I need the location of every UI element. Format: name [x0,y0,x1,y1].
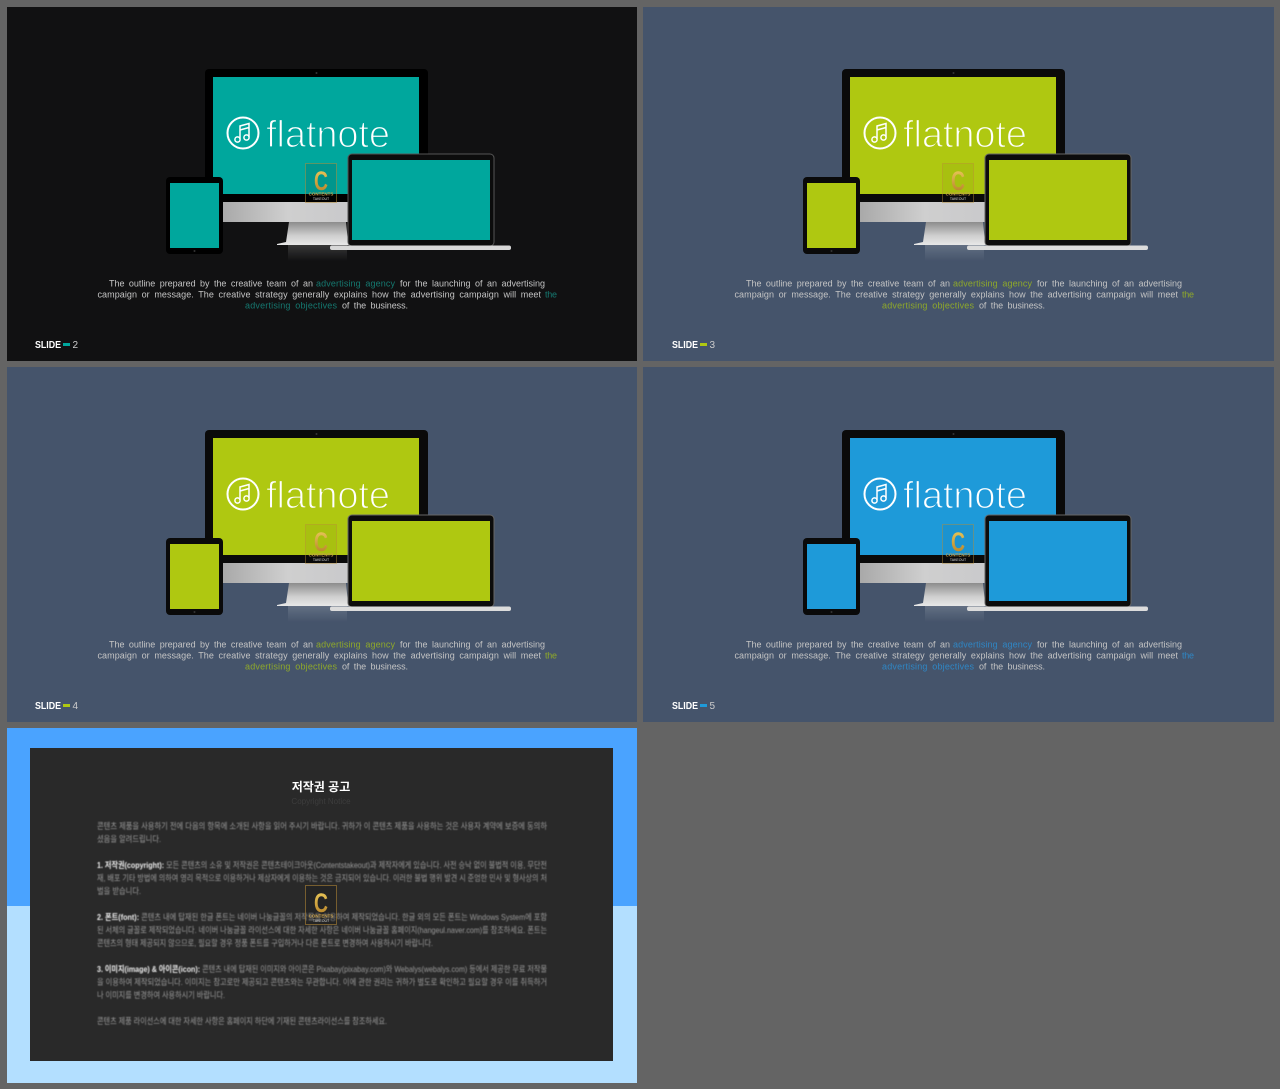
description text: advertising objectives [245,662,338,672]
notice body text: 나 이미지를 변경하여 사용하시기 바랍니다. [97,990,225,1000]
description text: The outline prepared by the creative team of an [746,278,950,288]
slide number: SLIDE [35,340,61,351]
description text: campaign or message. The creative strategy generally explains how the advertising campaign will meet [734,650,1178,660]
description text: for the launching of an advertising [400,640,545,650]
slide number [672,340,716,351]
slide number: SLIDE [35,701,61,712]
watermark badge: C [951,166,965,196]
description text: for the launching of an advertising [1037,278,1182,288]
slide number [672,701,716,712]
description text: advertising agency [953,640,1032,650]
slide number: 3 [710,340,716,351]
slide number [35,701,78,712]
watermark badge: TAKEOUT [950,197,967,201]
notice body text: 벌을 받습니다. [97,886,141,896]
description text [98,278,557,310]
watermark badge: CONTENTS [309,914,333,918]
device mockups [803,69,1148,261]
watermark badge: TAKEOUT [313,919,330,923]
description text: campaign or message. The creative strategy generally explains how the advertising campaign will meet [734,290,1178,300]
panel: slide 5 (slate, blue) [643,367,1274,722]
description text: for the launching of an advertising [400,278,545,288]
description text [98,640,557,672]
watermark badge: C [314,888,328,918]
description text: advertising objectives [245,300,338,310]
description text: the [545,650,557,660]
description text: The outline prepared by the creative team of an [746,640,950,650]
description text: The outline prepared by the creative team of an [109,640,313,650]
watermark badge: C [314,166,328,196]
slide number: 4 [72,701,78,712]
description text: the [1182,290,1194,300]
description text [734,640,1194,672]
watermark badge [942,524,974,564]
description text [734,278,1194,310]
description text: advertising agency [953,278,1032,288]
watermark badge [306,524,336,564]
description text: campaign or message. The creative strategy generally explains how the advertising campaign will meet [98,290,541,300]
heading: copyright notice: 저작권 공고 [292,779,350,794]
device mockups [803,430,1148,622]
heading: copyright notice [291,779,351,806]
description text: of the business. [979,300,1045,310]
notice body text: 1. 저작권(copyright): 모든 콘텐츠의 소유 및 저작권은 콘텐츠테이크아웃(Contentstakeout)과 제작자에게 있습니다. 사전 승낙 없이 불법적 이용, 무단전 [97,860,547,870]
description text: for the launching of an advertising [1037,640,1182,650]
slide number: 2 [72,340,78,351]
notice body text: 셨음을 알려드립니다. [97,834,161,844]
logo: flatnote: flatnote [266,114,390,156]
logo: flatnote: flatnote [903,114,1027,156]
notice body text: 된 서체의 글꼴로 제작되었습니다. 네이버 나눔글꼴 라이선스에 대한 자세한 사항은 네이버 나눔글꼴 홈페이지(hangeul.naver.com)를 참조하세요. 폰트는 [97,925,547,935]
description text: The outline prepared by the creative team of an [109,278,313,288]
watermark badge [306,164,336,202]
description text: advertising agency [316,640,396,650]
notice body text: 콘텐츠 제품을 사용하기 전에 다음의 항목에 소개된 사항을 읽어 주시기 바랍니다. 귀하가 이 콘텐츠 제품을 사용하는 것은 사용자 계약에 보증에 동의하 [97,821,547,831]
slide number [35,340,78,351]
description text: of the business. [342,662,408,672]
description text: the [545,290,557,300]
device mockups [166,69,511,261]
device mockups [166,430,511,622]
logo: flatnote: flatnote [266,475,390,517]
description text: advertising objectives [882,662,974,672]
watermark badge: CONTENTS [309,192,333,196]
watermark badge: CONTENTS [309,552,333,558]
watermark badge: CONTENTS [946,192,970,196]
panel: slide 2 (black, teal) [7,7,637,361]
description text: advertising agency [316,278,396,288]
panel: copyright notice slide [7,728,637,1083]
panel: slide 4 (slate, lime) [7,367,637,722]
slide number: SLIDE [672,340,698,351]
watermark badge: TAKEOUT [313,558,330,562]
watermark badge: C [314,527,328,557]
watermark badge [942,164,974,202]
notice body text: 을 이용하여 제작되었습니다. 이미지는 참고로만 제공되고 콘텐츠와는 무관합니다. 이에 관한 권리는 귀하가 별도로 확인하고 필요할 경우 이를 취득하거 [97,977,547,987]
watermark badge: CONTENTS [946,552,970,558]
heading: copyright notice: Copyright Notice [291,797,351,806]
watermark badge [306,886,336,924]
description text: of the business. [979,662,1045,672]
panel: slide 3 (slate, lime) [643,7,1274,361]
description text: campaign or message. The creative strategy generally explains how the advertising campaign will meet [98,650,541,660]
slide number: SLIDE [672,701,698,712]
slide number: 5 [710,701,716,712]
logo: flatnote: flatnote [903,475,1027,517]
watermark badge: C [951,527,965,557]
notice body text: 콘텐츠의 형태 제공되지 않으므로, 필요할 경우 정품 폰트를 구입하거나 다른 폰트로 변경하여 사용하시기 바랍니다. [97,938,433,948]
notice body text: 재, 배포 기타 방법에 의하여 영리 목적으로 이용하거나 제삼자에게 이용하는 것은 금지되어 있습니다. 이러한 불법 행위 발견 시 준엄한 민사 및 형사상의 처 [97,873,547,883]
notice body text: 2. 폰트(font): 콘텐츠 내에 탑재된 한글 폰트는 네이버 나눔글꼴의 저작물을 이용하여 제작되었습니다. 한글 외의 모든 폰트는 Windows System에 포함 [97,912,547,922]
description text: advertising objectives [882,300,974,310]
notice body text [97,821,547,1026]
watermark badge: TAKEOUT [313,197,330,201]
description text: the [1182,650,1194,660]
description text: of the business. [342,300,408,310]
watermark badge: TAKEOUT [950,558,967,562]
notice body text: 3. 이미지(image) & 아이콘(icon): 콘텐츠 내에 탑재된 이미지와 아이콘은 Pixabay(pixabay.com)와 Webalys(webalys.com) 등에서 제공한 무료 저작물 [97,964,547,974]
notice body text: 콘텐츠 제품 라이선스에 대한 자세한 사항은 홈페이지 하단에 기재된 콘텐츠라이선스를 참조하세요. [97,1016,387,1026]
